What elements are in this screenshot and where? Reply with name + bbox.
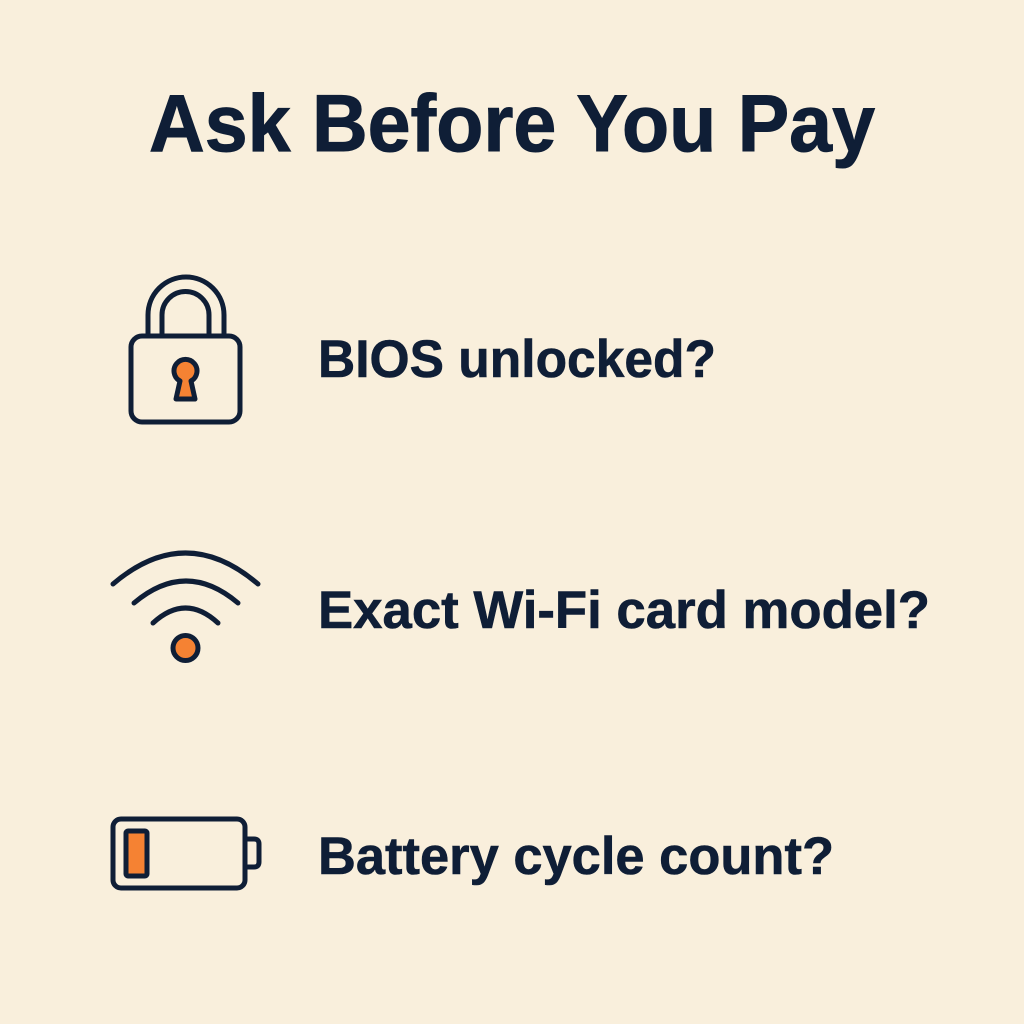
- icon: padlock: [131, 277, 240, 422]
- icon: wi-fi signal: [113, 553, 258, 660]
- label: Exact Wi-Fi card model?: Exact Wi-Fi card model?: [318, 581, 930, 640]
- label: BIOS unlocked?: BIOS unlocked?: [318, 330, 716, 389]
- label: Battery cycle count?: Battery cycle count?: [318, 827, 834, 886]
- title: Ask Before You Pay: [149, 79, 875, 169]
- icon: low battery: [113, 819, 259, 888]
